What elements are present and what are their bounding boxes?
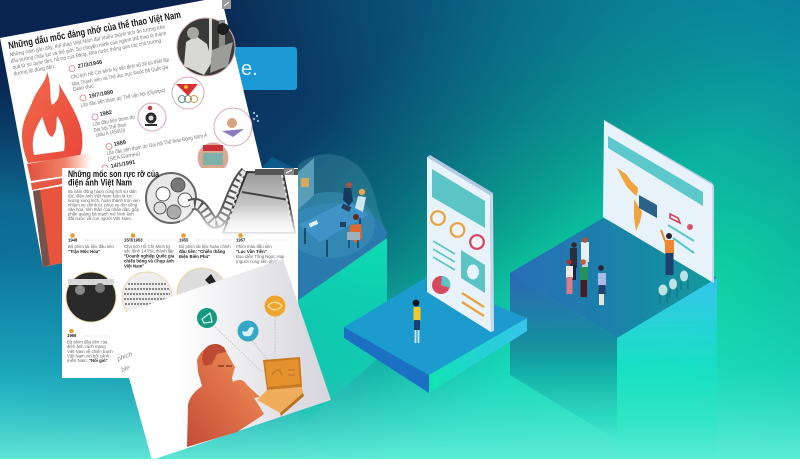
film reel <box>146 173 196 223</box>
milestone 1946: Chủ tịch Hồ Chí Minh ký sắc lệnh số 38 tại thiết lập <box>70 56 170 81</box>
icon: twitter <box>238 320 258 342</box>
poster: cinema milestones <box>62 168 298 378</box>
icon: eye <box>264 296 286 316</box>
intro paragraph: nhiệm vụ chính trị, phục vụ đời sống <box>68 202 138 208</box>
entry 1955: đầu tiên: "Chiến thắng <box>179 249 225 254</box>
entry 1953: 15/3/1953 <box>124 238 143 242</box>
milestone 1946: Nha Thanh niên và Thể dục trực thuộc Bộ Quốc gia <box>71 64 169 88</box>
logo: olympic committee <box>172 77 204 109</box>
entry 1966 <box>67 329 113 363</box>
entry 1957: "Lục Vân Tiên" <box>236 249 267 254</box>
person at laptop <box>187 346 264 447</box>
right platform faces <box>510 218 717 459</box>
entry 1953: "Doanh nghiệp Quốc gia <box>124 254 175 258</box>
chairs <box>658 270 688 304</box>
intro paragraph: đường lối đúng đắn. <box>13 63 56 77</box>
entry 1966: Việt Nam về chiến tranh <box>67 349 113 354</box>
entry 1966: Bộ phim đầu tiên của <box>67 340 108 344</box>
icon: megaphone <box>197 308 217 328</box>
flame <box>22 72 82 163</box>
milestone 1946: 27/3/1946 <box>77 60 103 70</box>
entry 1966: điện ảnh cách mạng <box>67 344 106 349</box>
entry 1955 <box>179 233 231 259</box>
milestone 1980: Lần đầu tiên tham dự Thế vận hội (Olympic) <box>80 88 166 109</box>
milestone 1989: (SEA Games) <box>107 151 141 163</box>
milestone 1982: 1982 <box>99 110 113 118</box>
entry 1948: "Trận Mộc Hóa" <box>68 249 100 254</box>
audience group <box>566 237 606 305</box>
intro paragraph: quả từ sự quan tâm, hỗ trợ của Đảng, Nhà nước thông qua các chủ trương, <box>12 37 163 71</box>
entry 1955: Bộ phim tài liệu hoàn chỉnh <box>179 244 231 249</box>
expand icon <box>222 0 231 9</box>
milestone 1982 <box>92 110 136 139</box>
intro paragraph <box>68 189 140 221</box>
standing person <box>413 300 420 343</box>
small platform <box>344 277 527 393</box>
tablet board <box>427 155 494 332</box>
intro paragraph: lượng xung kích, hoàn thành trọn vẹn <box>68 198 140 203</box>
entry 1957: Phim màu đầu tiên <box>236 244 272 249</box>
photo: document <box>122 272 172 312</box>
entry 1953: sắc lệnh 147/SL thành lập <box>124 248 174 254</box>
handwritten notes: ble <box>120 364 131 374</box>
handwritten notes: phich <box>115 351 134 363</box>
poster title <box>68 169 160 188</box>
decorative dots near button <box>253 112 259 122</box>
entry 1966: Việt Nam với bối cảnh <box>67 354 110 358</box>
poster title: Những dấu mốc đáng nhớ của thể thao Việt Nam <box>7 9 182 52</box>
entry 1948: 1948 <box>68 238 78 242</box>
presentation board <box>603 120 714 283</box>
milestone 1989: Lần đầu tiên tham dự Đại hội Thể thao Đông Nam Á <box>106 132 208 157</box>
entry 1957: Đạo diễn Tống Ngọc Hạp <box>236 254 285 259</box>
milestone 1980: 19/7/1980 <box>88 90 114 100</box>
milestone 1946: Giáo dục <box>72 83 95 93</box>
timeline axis <box>84 240 288 241</box>
entry 1966: miền Nam: "Nổi gió" <box>67 358 108 363</box>
film strip <box>190 172 298 233</box>
milestone 1989 <box>102 132 208 171</box>
right platform with presentation board <box>510 120 717 459</box>
intro paragraph: văn hóa, tinh thần của nhân dân, góp <box>68 207 140 212</box>
entry 1953: Chủ tịch Hồ Chí Minh ký <box>124 244 171 249</box>
milestone 1982: châu Á (ASIAD) <box>95 127 126 139</box>
blue button <box>200 47 297 90</box>
logo: asiad <box>138 103 166 131</box>
intro paragraph: đấu trường châu lục và thế giới. Sự chuyển mình của ngành thể thao là thành <box>10 30 167 65</box>
entry 1957: (người cùng tiến phía) <box>236 259 279 264</box>
milestone 1982: Đại hội Thể thao <box>93 121 127 134</box>
intro paragraph: phần quảng bá mạnh mẽ hình ảnh <box>68 212 134 216</box>
photo: sea games <box>198 143 228 173</box>
intro paragraph: đất nước và con người Việt Nam. <box>68 216 132 221</box>
milestone 1982: Lần đầu tiên tham dự <box>92 114 136 128</box>
milestone 1946 <box>69 56 170 93</box>
pie chart <box>432 276 451 294</box>
photo: battle <box>176 268 224 295</box>
entry 1948 <box>68 233 114 254</box>
entry 1966: 1966 <box>67 333 77 338</box>
poster: sports milestones <box>0 0 262 267</box>
torch <box>27 153 91 267</box>
small platform with tablet board <box>344 155 527 393</box>
intro paragraph: tộc, điện ảnh Việt Nam luôn là lực <box>68 194 133 198</box>
glasses and hair <box>202 344 232 366</box>
entry 1953: chiếu bóng và Chụp ảnh <box>124 258 174 264</box>
entry 1953: Việt Nam" <box>124 264 144 268</box>
poster: social media person <box>112 259 331 460</box>
entry 1948: Bộ phim tài liệu đầu tiên <box>68 244 114 249</box>
intro paragraph <box>9 23 167 77</box>
entry 1953 <box>124 233 175 268</box>
poster title: Những mốc son rực rỡ của <box>68 169 160 179</box>
photo: historic portrait <box>177 18 235 76</box>
entry 1957: 1957 <box>236 238 246 242</box>
dotted connectors <box>215 317 275 372</box>
progress rings <box>431 211 484 249</box>
laptop <box>257 357 304 416</box>
photo: soldiers <box>66 272 116 322</box>
entry 1955: Điện Biên Phủ" <box>179 254 210 259</box>
handwritten notes <box>115 351 134 374</box>
milestone 1989: 1989 <box>113 140 127 148</box>
entry 1955: 1955 <box>179 238 189 242</box>
intro paragraph: Những năm gần đây, thể thao Việt Nam đạt nhiều thành tích ấn tượng trên <box>9 23 166 58</box>
blue button: e. <box>241 58 258 80</box>
isometric meeting room under dome <box>262 154 387 430</box>
expand icon <box>284 168 294 175</box>
intro paragraph: 65 năm đồng hành cùng lịch sử dân <box>68 189 137 194</box>
milestone 1989: 14/1/1991 <box>110 160 136 170</box>
presenter <box>661 230 674 275</box>
poster title: điện ảnh Việt Nam <box>68 178 132 188</box>
logo: sea games <box>214 108 252 146</box>
entry 1957 <box>236 233 285 264</box>
bottom white strip <box>0 459 800 465</box>
